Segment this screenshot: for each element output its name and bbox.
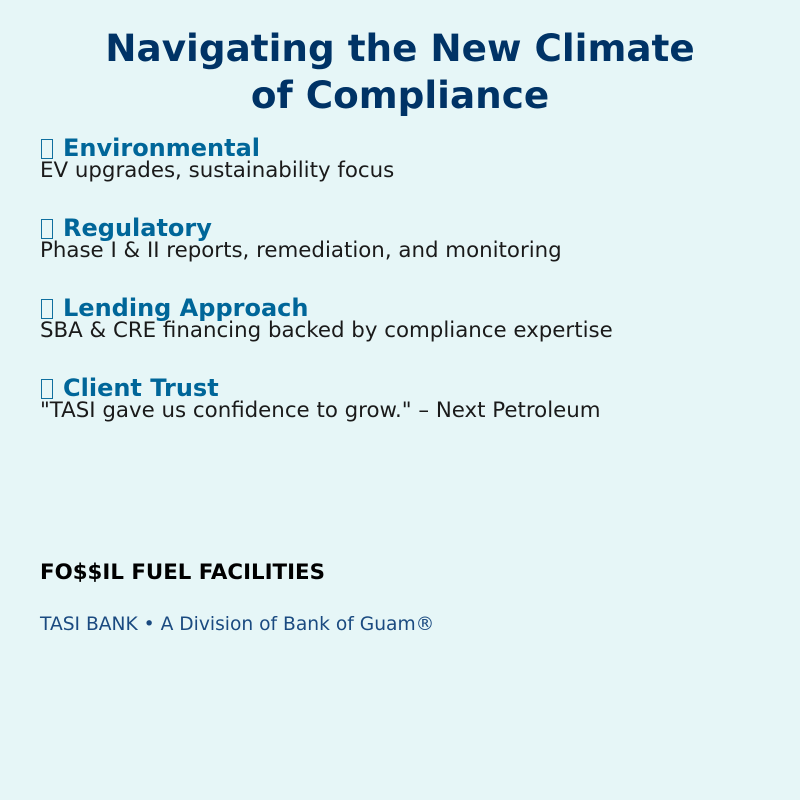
section: regulatory [40,214,562,263]
text: client testimonial: "TASI gave us confidence to grow." – Next Petroleum [40,398,601,423]
section: lending approach [40,294,613,343]
icon: missing glyph box [41,379,53,399]
text: lending detail: SBA & CRE financing backed by compliance expertise [40,318,613,343]
footer: bank name: TASI BANK • A Division of Bank of Guam® [40,614,434,635]
icon: missing glyph box [41,219,53,239]
heading: regulatory: Regulatory [63,214,212,242]
heading: lending approach: Lending Approach [63,294,308,322]
section: environmental [40,134,394,183]
title: Navigating the New Climate [105,26,695,70]
icon: missing glyph box [41,299,53,319]
heading: environmental: Environmental [63,134,260,162]
title: of Compliance [251,73,549,117]
icon: missing glyph box [41,139,53,159]
text: regulatory detail: Phase I & II reports, remediation, and monitoring [40,238,562,263]
text: environmental detail: EV upgrades, sustainability focus [40,158,394,183]
tagline: FO$$IL FUEL FACILITIES [40,560,325,585]
heading: client trust: Client Trust [63,374,219,402]
section: client trust [40,374,601,423]
title [105,26,695,117]
